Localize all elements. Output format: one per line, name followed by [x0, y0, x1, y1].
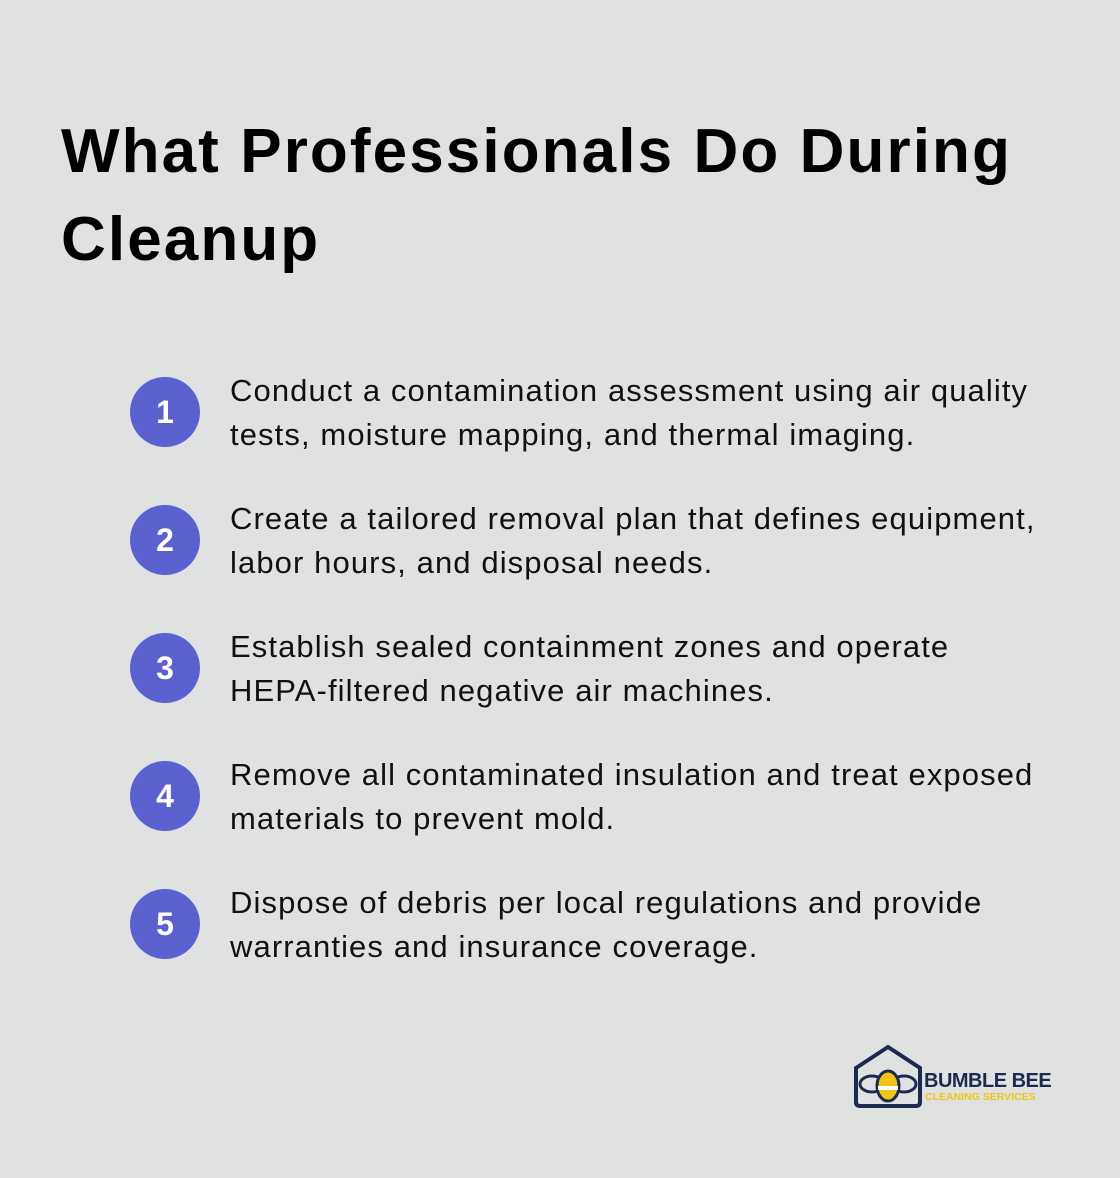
- step 3: HEPA-filtered negative air machines.: [230, 673, 774, 708]
- step 4: materials to prevent mold.: [230, 801, 615, 836]
- step 1: 1: [156, 394, 174, 430]
- step 1: [130, 373, 1028, 452]
- title: Cleanup: [61, 205, 320, 274]
- step 5: Dispose of debris per local regulations and provide: [230, 885, 982, 920]
- icon: house bee: [854, 1044, 922, 1108]
- step 5: warranties and insurance coverage.: [230, 929, 759, 964]
- step 3: [130, 629, 949, 708]
- step 4: Remove all contaminated insulation and treat exposed: [230, 757, 1033, 792]
- step 3: Establish sealed containment zones and operate: [230, 629, 949, 664]
- step 2: 2: [156, 522, 174, 558]
- step 4: 4: [156, 778, 174, 814]
- brand name: BUMBLE BEE: [924, 1070, 1051, 1092]
- step 1: Conduct a contamination assessment using air quality: [230, 373, 1028, 408]
- step 2: labor hours, and disposal needs.: [230, 545, 713, 580]
- step 4: [130, 757, 1033, 836]
- step 2: [130, 501, 1036, 580]
- logo: CLEANING SERVICES: [925, 1091, 1036, 1103]
- step 5: 5: [156, 906, 174, 942]
- title: What Professionals Do During: [61, 117, 1012, 186]
- step 1: tests, moisture mapping, and thermal imaging.: [230, 417, 915, 452]
- step 2: Create a tailored removal plan that defines equipment,: [230, 501, 1036, 536]
- logo: [854, 1044, 1051, 1108]
- title: [61, 117, 1012, 274]
- step 5: [130, 885, 982, 964]
- step 3: 3: [156, 650, 174, 686]
